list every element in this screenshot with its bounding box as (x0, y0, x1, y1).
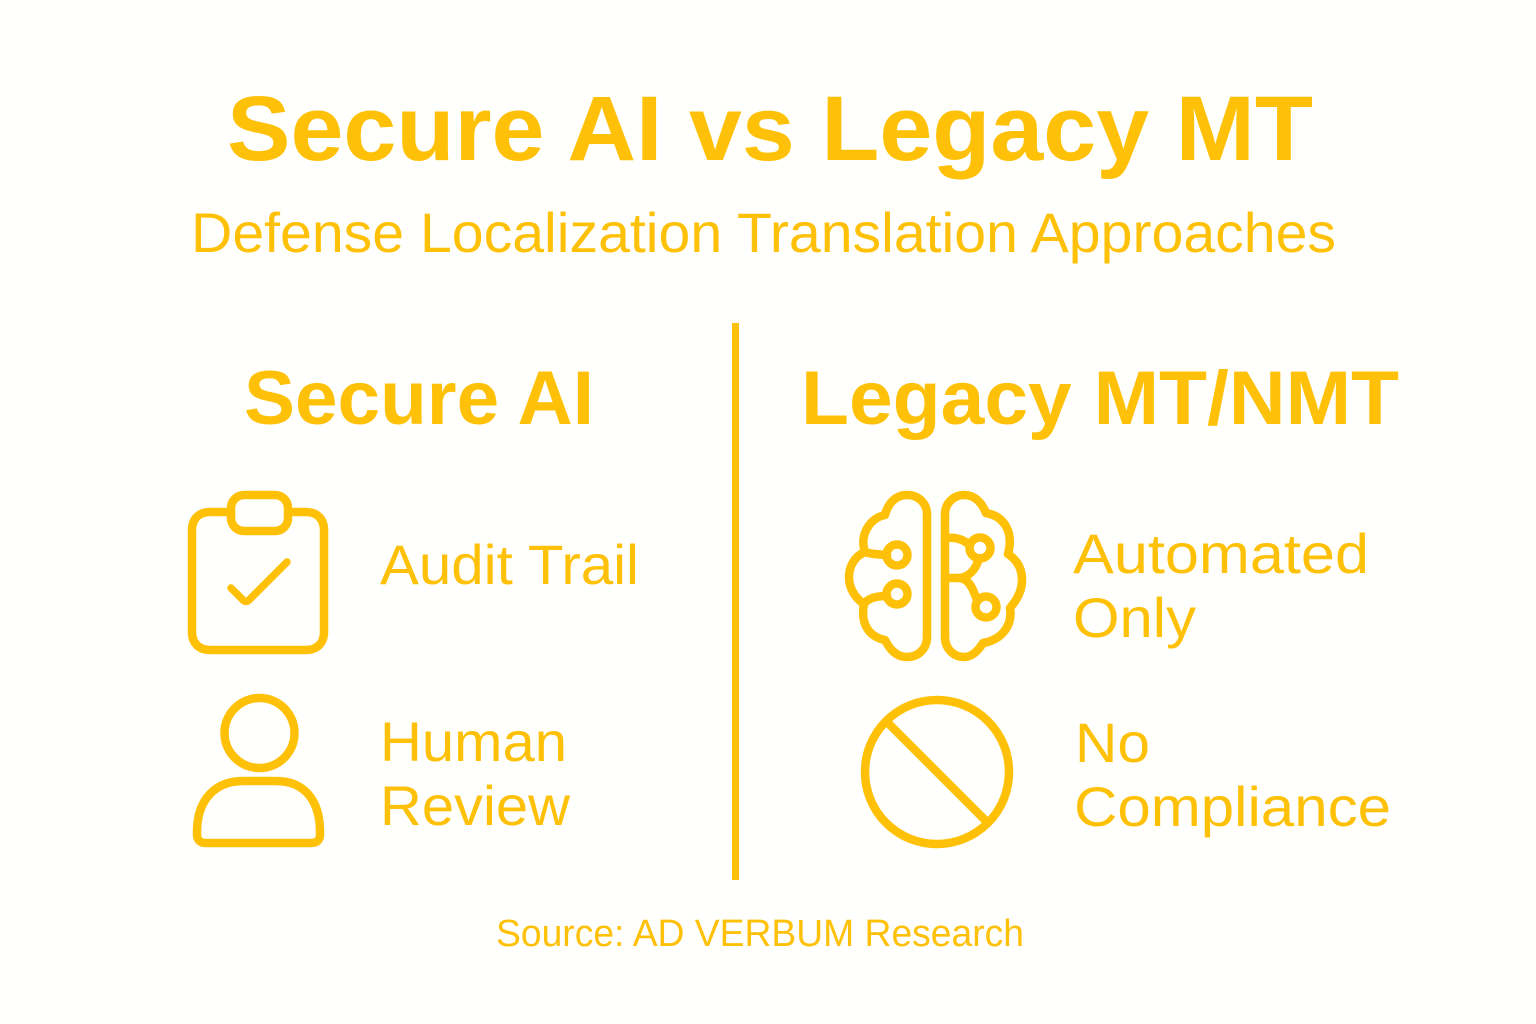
subtitle: Defense Localization Translation Approaches (191, 201, 1336, 264)
icon: brain with circuit nodes (849, 495, 1022, 657)
heading: Secure AI: Secure AI (244, 356, 594, 441)
panel: Legacy MT/NMT (801, 356, 1399, 844)
label: Compliance: Compliance (1074, 775, 1391, 838)
label: Human: Human (380, 710, 567, 773)
center divider (732, 323, 739, 880)
source note: Source: AD VERBUM Research (496, 913, 1024, 955)
label: No: No (1075, 711, 1150, 774)
title: Secure AI vs Legacy MT (227, 78, 1313, 180)
label: Audit Trail: Audit Trail (380, 533, 639, 596)
panel: Secure AI (192, 356, 639, 843)
heading: Legacy MT/NMT: Legacy MT/NMT (801, 356, 1399, 441)
label: Automated: Automated (1073, 522, 1369, 585)
label: Only: Only (1073, 586, 1196, 649)
label: Review: Review (380, 774, 571, 837)
icon: person (197, 698, 320, 843)
icon: prohibited sign (865, 700, 1009, 844)
icon: clipboard with check (192, 495, 324, 650)
